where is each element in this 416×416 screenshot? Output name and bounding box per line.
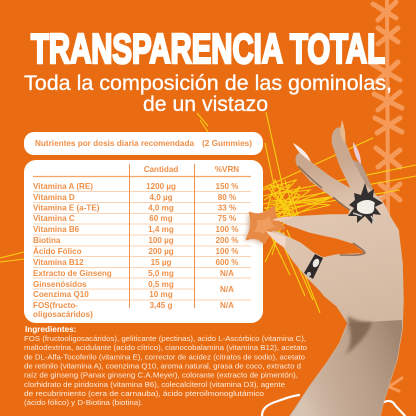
percent VRN values: 75 % — [218, 214, 236, 223]
quantities: 15 µg — [151, 258, 171, 267]
decorative cross chain — [372, 0, 402, 216]
percent VRN values: N/A — [220, 301, 234, 310]
nutrient names: Extracto de Ginseng — [33, 269, 112, 278]
panel: nutrient table — [24, 160, 263, 323]
nutrient names — [33, 182, 112, 319]
percent VRN values: 100 % — [216, 247, 238, 256]
nutrient names: Vitamina E (a-TE) — [33, 204, 100, 212]
subtitle: Toda la composición de las gominolas, — [24, 72, 392, 95]
ingredients text: Ingredientes: — [25, 325, 76, 334]
hand with rings — [266, 120, 403, 416]
band ring — [304, 254, 323, 279]
quantities: 60 mg — [149, 214, 173, 223]
nutrient names: Vitamina C — [33, 214, 75, 223]
nutrient names: Vitamina B6 — [33, 225, 80, 234]
spiked ring — [348, 183, 383, 224]
wrist crease shadow — [345, 316, 372, 355]
percent VRN values: 33 % — [218, 204, 236, 212]
quantities: 3,45 g — [150, 301, 173, 310]
ingredients text: de retinilo (vitamina A), coenzima Q10, aroma natural, grasa de coco, extracto d — [24, 362, 301, 370]
ingredients text: de DL-Alfa-Tocoferilo (vitamina E), corrector de acidez (citratos de sodio), acetato — [24, 352, 305, 362]
quantities: 10 mg — [149, 290, 173, 299]
quantities: 100 µg — [148, 236, 174, 245]
table header: %VRN — [215, 165, 239, 174]
table header: Cantidad — [144, 165, 178, 174]
nutrient names: Vitamina D — [33, 193, 75, 202]
gummy star — [244, 207, 284, 245]
ingredients text: raíz de ginseng (Panax ginseng C.A.Meyer), colorante (extracto de pimentón), — [24, 370, 298, 380]
quantities: 4,0 mg — [148, 204, 174, 212]
percent VRN values — [216, 182, 238, 310]
quantities: 5,0 mg — [148, 269, 174, 278]
quantities: 0,5 mg — [148, 280, 174, 289]
nutrient names: Vitamina B12 — [33, 258, 84, 267]
nutrient names: Ginsenósidos — [33, 280, 87, 289]
percent VRN values: 150 % — [216, 182, 238, 191]
subtitle — [24, 72, 392, 116]
percent VRN values: 200 % — [216, 236, 238, 245]
percent VRN values: 80 % — [218, 193, 236, 202]
subtitle: de un vistazo — [143, 93, 268, 116]
nutrient names: Vitamina A (RE) — [33, 182, 93, 191]
percent VRN values: 100 % — [216, 225, 238, 234]
decorative bottom star and white outline — [262, 366, 405, 416]
quantities: 4,0 µg — [149, 193, 173, 202]
quantities — [146, 182, 176, 310]
percent VRN values: 600 % — [216, 258, 238, 267]
quantities: 200 µg — [148, 247, 174, 256]
ingredients text: de recubrimiento (cera de carnauba), ácido pteroilmonoglutámico — [24, 389, 264, 398]
quantities: 1200 µg — [146, 182, 176, 191]
ingredients text: FOS (fructooligosacáridos), geliticante (pectinas), acido L-Ascórbico (vitamina C), — [24, 334, 306, 343]
third finger behind — [353, 160, 378, 200]
nutrient names: Ácido Fólico — [33, 247, 82, 256]
panel: dose heading — [24, 132, 263, 155]
nutrient names: oligosacáridos) — [33, 310, 93, 319]
ingredients text: (ácido fólico) y D-Biotina (biotina). — [24, 398, 143, 407]
percent VRN values: N/A — [220, 285, 234, 294]
quantities: 1,4 mg — [148, 225, 174, 234]
ingredients text — [24, 325, 307, 407]
forearm shading — [290, 320, 402, 416]
table header — [144, 165, 239, 174]
nutrient names: FOS(fructo- — [33, 301, 78, 310]
yellow scribble lines — [0, 112, 416, 313]
nails — [266, 120, 361, 248]
hand, fingers, thumb and forearm — [272, 128, 403, 416]
panel: dose heading: (2 Gummies) — [202, 139, 252, 148]
ingredients text: maltodextrina, acidulante (acido cítrico), cianocobalamina (vitamina B12), acetato — [24, 343, 307, 352]
nutrient names: Coenzima Q10 — [33, 290, 89, 299]
ingredients text: clorhidrato de piridoxina (vitamina B6), colecalciterol (vitamina D3), agente — [24, 380, 285, 389]
panel: dose heading: Nutrientes por dosis diaria recomendada — [35, 139, 195, 148]
knuckle shadows — [298, 166, 365, 255]
percent VRN values: N/A — [220, 269, 234, 278]
nutrient names: Biotina — [33, 236, 61, 245]
